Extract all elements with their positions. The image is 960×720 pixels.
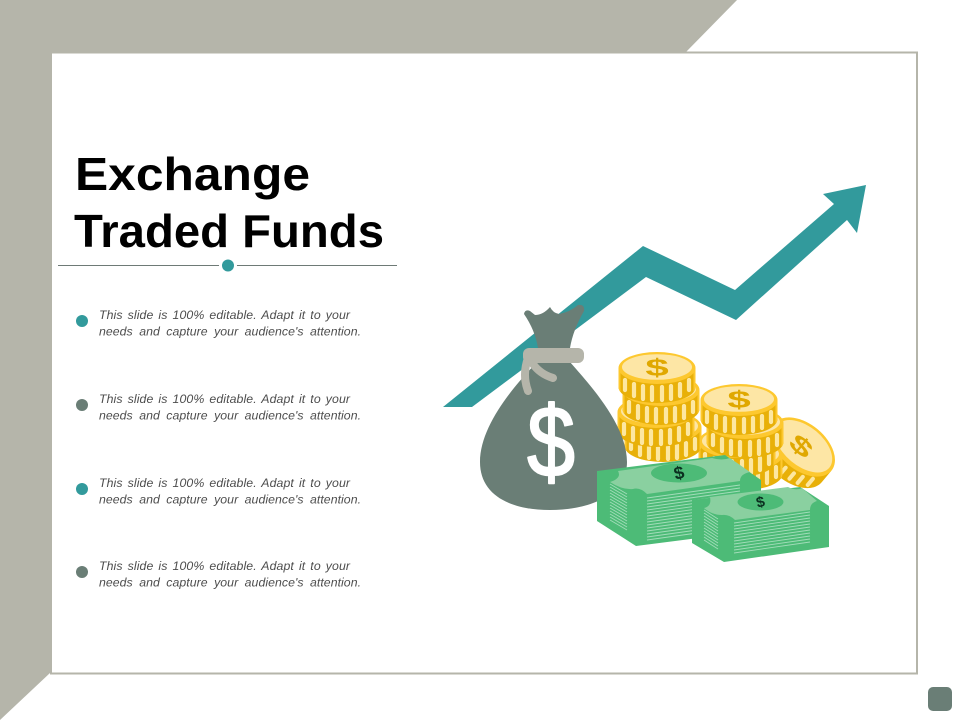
- bag dollar sign: $: [527, 386, 575, 497]
- bullet item 2: This slide is 100% editable. Adapt it to your: [99, 392, 351, 406]
- bullet item 2: needs and capture your audience's attention.: [99, 408, 361, 422]
- rising arrow: [443, 185, 866, 407]
- tilted coin: [750, 406, 846, 500]
- main white panel: [51, 52, 917, 674]
- title divider with dot: [58, 256, 397, 274]
- coin stack right: $: [727, 387, 751, 413]
- coin stack left: [618, 352, 702, 462]
- large banknote stack: $: [672, 462, 686, 484]
- bullet item 3: needs and capture your audience's attention.: [99, 492, 361, 506]
- coin stack left: $: [645, 355, 669, 381]
- bullet item 2: [76, 392, 361, 422]
- title: Traded Funds: [74, 205, 384, 257]
- bullet item 1: [76, 308, 361, 338]
- money bag: [480, 305, 627, 510]
- bullet item 1: This slide is 100% editable. Adapt it to your: [99, 308, 351, 322]
- large banknote stack: [597, 455, 761, 546]
- background corner shape: [0, 0, 737, 720]
- tilted coin: $: [783, 429, 818, 464]
- bullet item 3: [76, 476, 361, 506]
- coin stack right: [698, 384, 784, 490]
- corner square button: [928, 687, 952, 711]
- small banknote stack: [692, 487, 829, 562]
- bullet item 1: needs and capture your audience's attention.: [99, 324, 361, 338]
- small banknote stack: $: [755, 493, 767, 512]
- title: Exchange: [75, 148, 310, 200]
- bag tie: [523, 348, 584, 391]
- bullet item 4: [76, 559, 361, 590]
- bullet item 4: needs and capture your audience's attention.: [99, 576, 361, 590]
- bullet item 4: This slide is 100% editable. Adapt it to your: [99, 559, 351, 573]
- bullet item 3: This slide is 100% editable. Adapt it to your: [99, 476, 351, 490]
- title: [74, 148, 384, 257]
